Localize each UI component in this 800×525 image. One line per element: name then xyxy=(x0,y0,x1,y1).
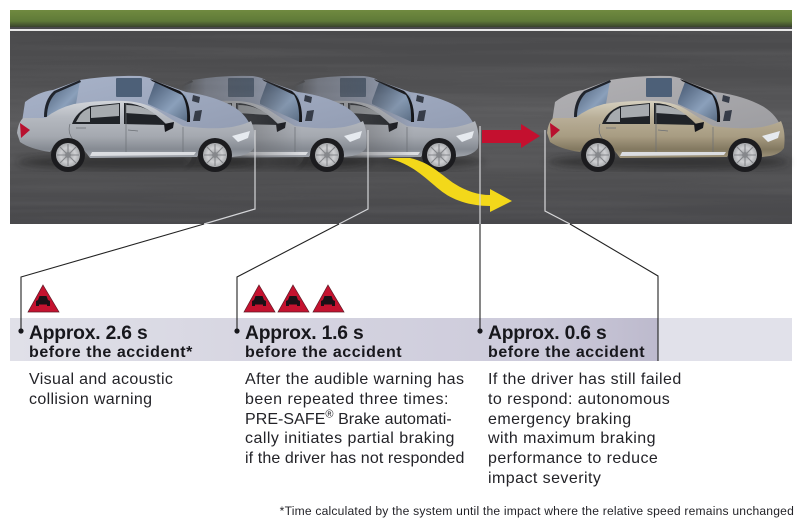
car: second position ghost xyxy=(188,76,371,172)
text block: 0.6 s emergency braking: to respond: autonomous xyxy=(488,391,670,408)
leader line: 1.6 s xyxy=(234,130,368,334)
car: vehicle ahead gold xyxy=(546,76,790,172)
text block: 2.6 s warning xyxy=(29,323,193,408)
text block: 0.6 s emergency braking: with maximum braking xyxy=(488,430,656,447)
text block: 0.6 s emergency braking xyxy=(488,323,682,487)
text block: 1.6 s partial braking: been repeated three times: xyxy=(245,391,449,408)
text block: 1.6 s partial braking: before the accident xyxy=(245,344,402,361)
band: timeline xyxy=(10,318,792,361)
arrow: red approach xyxy=(482,124,540,148)
car: first position silver xyxy=(16,76,260,172)
text block: 0.6 s emergency braking: before the accident xyxy=(488,344,645,361)
text block: 0.6 s emergency braking: emergency braking xyxy=(488,411,632,428)
leader line: impact xyxy=(545,130,658,361)
text block: 0.6 s emergency braking: Approx. 0.6 s xyxy=(488,323,606,344)
text block: 2.6 s warning: Visual and acoustic xyxy=(29,371,173,388)
scene: road photo with cars xyxy=(10,10,792,361)
text block: 0.6 s emergency braking: impact severity xyxy=(488,470,601,487)
text block: 0.6 s emergency braking: If the driver has still failed xyxy=(488,371,682,388)
footnote: *Time calculated by the system until the impact where the relative speed remains unchanged xyxy=(280,504,794,518)
text block: 0.6 s emergency braking: performance to reduce xyxy=(488,450,658,467)
text block: 2.6 s warning: collision warning xyxy=(29,391,152,408)
background: grass strip xyxy=(10,10,792,27)
icon: three warning triangles xyxy=(244,285,344,312)
text block: 1.6 s partial braking: if the driver has not responded xyxy=(245,450,465,467)
text block: 1.6 s partial braking: cally initiates partial braking xyxy=(245,430,455,447)
text block: 1.6 s partial braking: Approx. 1.6 s xyxy=(245,323,363,344)
text block: 2.6 s warning: before the accident* xyxy=(29,344,193,361)
text block: 1.6 s partial braking: PRE-SAFE® Brake automati- xyxy=(245,408,452,428)
icon: single warning triangle xyxy=(28,285,59,312)
car: third position ghost xyxy=(299,76,484,172)
text block: 1.6 s partial braking: After the audible warning has xyxy=(245,371,464,388)
leader line: 0.6 s xyxy=(477,126,483,334)
background: road xyxy=(10,27,792,224)
text block: 2.6 s warning: Approx. 2.6 s xyxy=(29,323,147,344)
text block: 1.6 s partial braking xyxy=(245,323,465,467)
leader line: 2.6 s xyxy=(18,130,255,334)
arrow: yellow evasive path xyxy=(388,158,512,212)
